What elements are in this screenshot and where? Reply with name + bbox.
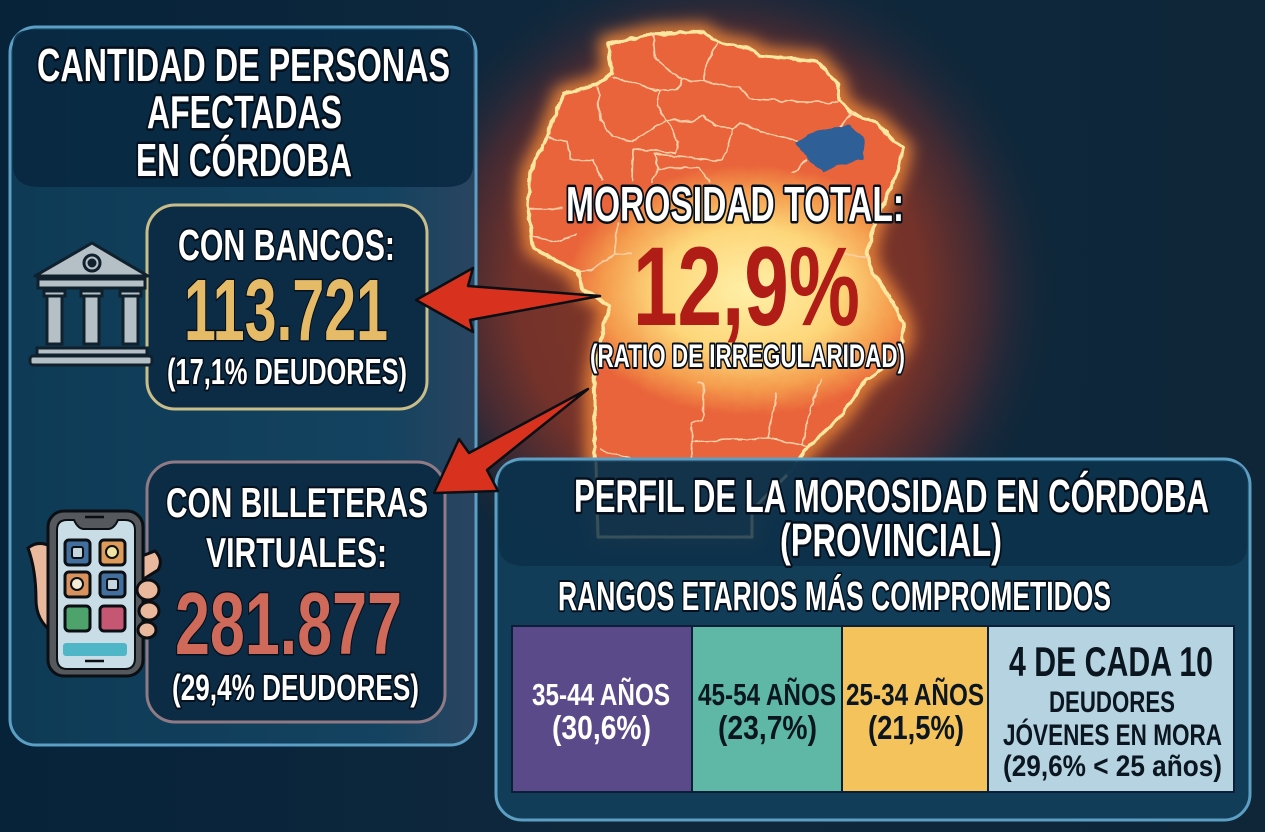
headline: morosidad total: MOROSIDAD TOTAL:: [566, 178, 904, 232]
card: con billeteras virtuales: (29,4% DEUDORES): [172, 667, 419, 708]
cell: 25-34 años: 25-34 AÑOS: [846, 677, 984, 712]
card: con bancos: (17,1% DEUDORES): [167, 351, 407, 392]
cell: 45-54 años: [692, 626, 842, 792]
headline: morosidad total: 12,9%: [633, 224, 860, 349]
headline: morosidad total: (RATIO DE IRREGULARIDAD): [590, 338, 905, 374]
cell: 4 de cada 10: DEUDORES: [1049, 686, 1175, 719]
headline: morosidad total: [566, 178, 905, 374]
arrow to bancos: [416, 268, 600, 332]
card: con billeteras virtuales: CON BILLETERAS: [166, 479, 428, 526]
panel header: [13, 30, 473, 187]
panel header: EN CÓRDOBA: [136, 134, 352, 186]
arrow to billeteras: [434, 389, 588, 493]
panel header: CANTIDAD DE PERSONAS: [37, 39, 450, 91]
panel: personas afectadas: [10, 27, 476, 745]
cell: 35-44 años: 35-44 AÑOS: [532, 677, 670, 712]
cell: 35-44 años: [512, 626, 692, 792]
card: con billeteras virtuales: 281.877: [175, 574, 402, 673]
icon: bank: [30, 243, 152, 365]
card: con billeteras virtuales: [147, 462, 445, 722]
cell: 45-54 años: 45-54 AÑOS: [698, 677, 836, 712]
card: con bancos: CON BANCOS:: [178, 221, 395, 270]
card: con billeteras virtuales: VIRTUALES:: [206, 529, 387, 576]
highlighted department in blue: [795, 125, 865, 172]
map of Córdoba province: [528, 32, 903, 537]
icon: phone in hand: [28, 511, 160, 676]
cell: 25-34 años: [842, 626, 988, 792]
panel header: AFECTADAS: [147, 86, 342, 138]
cell: 4 de cada 10: (29,6% < 25 años): [1003, 750, 1222, 783]
cell: 4 de cada 10: [988, 626, 1234, 792]
panel header: [499, 462, 1247, 566]
card: con bancos: 113.721: [184, 262, 388, 359]
panel header: (PROVINCIAL): [780, 514, 1002, 566]
panel: perfil de la morosidad: [496, 459, 1250, 820]
cell: 25-34 años: (21,5%): [868, 709, 964, 746]
ghost of the map behind the panel: [596, 462, 787, 537]
card: con bancos: [147, 205, 427, 409]
cell: 35-44 años: (30,6%): [552, 709, 651, 746]
cell: 45-54 años: (23,7%): [718, 709, 817, 746]
